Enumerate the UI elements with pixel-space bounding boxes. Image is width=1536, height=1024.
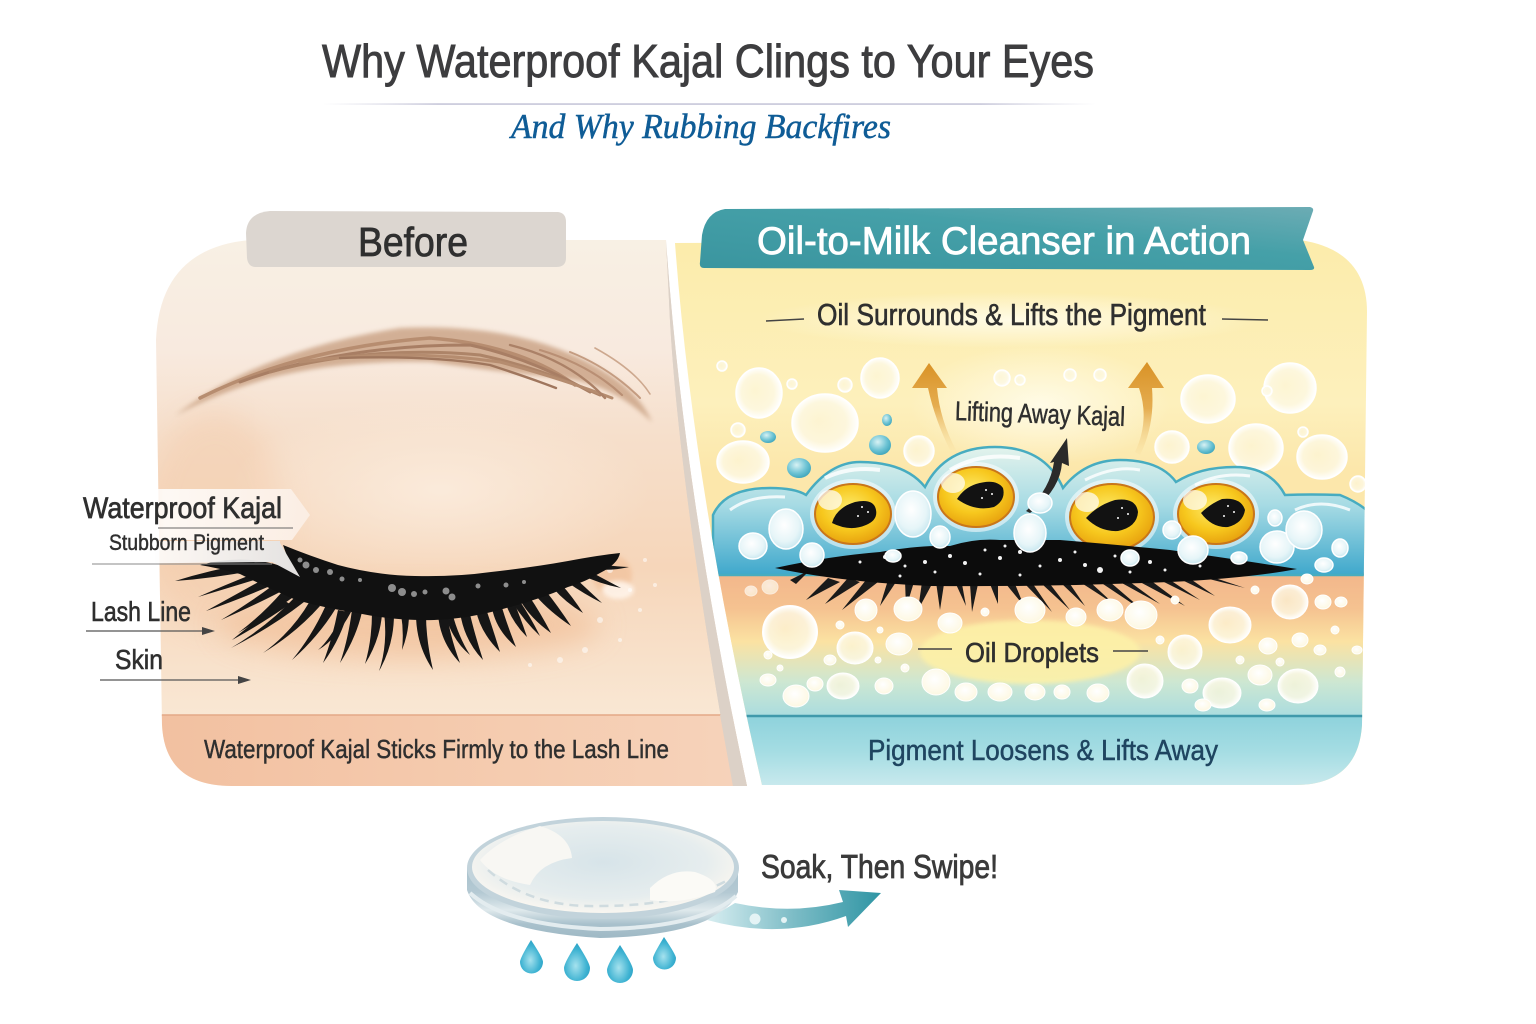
icon: water drops (520, 937, 676, 983)
callout: waterproof kajal: Stubborn Pigment (109, 530, 264, 555)
heading ribbon: Oil-to-Milk Cleanser in Action (757, 220, 1251, 263)
icon: cotton pad (467, 817, 739, 938)
heading: before (246, 211, 566, 267)
kajal line (200, 545, 620, 620)
lashes (175, 562, 629, 671)
label: lash line: Lash Line (91, 596, 191, 627)
subtitle: And Why Rubbing Backfires (509, 107, 891, 146)
bottom caption: Pigment Loosens & Lifts Away (868, 735, 1218, 767)
oil droplets label: Oil Droplets (965, 637, 1099, 668)
subheading: oil surrounds: Oil Surrounds & Lifts the Pigment (817, 297, 1206, 332)
lower oil droplets (745, 574, 1362, 711)
soap bubbles on kajal (739, 491, 1348, 572)
kajal streak (775, 540, 1297, 612)
label: skin: Skin (115, 644, 163, 675)
bottom caption: Waterproof Kajal Sticks Firmly to the Lash Line (204, 734, 669, 764)
heading: before: Before (358, 219, 468, 265)
eyebrow (176, 327, 652, 422)
freckles (528, 558, 657, 667)
title: Why Waterproof Kajal Clings to Your Eyes (322, 35, 1094, 87)
dark lift arrow (1026, 438, 1069, 513)
oil orbs with pigment (810, 462, 1259, 555)
heading ribbon (700, 207, 1314, 270)
panel: before (145, 240, 760, 790)
blue band (746, 716, 1362, 785)
eye: lashes and kajal (175, 545, 629, 671)
label: skin (100, 644, 251, 684)
gold lift arrows (912, 362, 1164, 455)
blue droplets (760, 414, 1215, 478)
label: soak then swipe: Soak, Then Swipe! (761, 848, 998, 885)
divider panel edge (666, 240, 747, 786)
arrow: swipe (707, 890, 881, 929)
panel: oil-to-milk cleanser (675, 240, 1380, 788)
glitter (298, 558, 526, 600)
upper oil bubbles (717, 358, 1366, 492)
bottom band (150, 715, 760, 790)
callout: waterproof kajal: Waterproof Kajal (83, 492, 282, 525)
label: lifting away kajal: Lifting Away Kajal (955, 396, 1126, 432)
foam domes (713, 447, 1376, 575)
callout: waterproof kajal (83, 489, 310, 577)
